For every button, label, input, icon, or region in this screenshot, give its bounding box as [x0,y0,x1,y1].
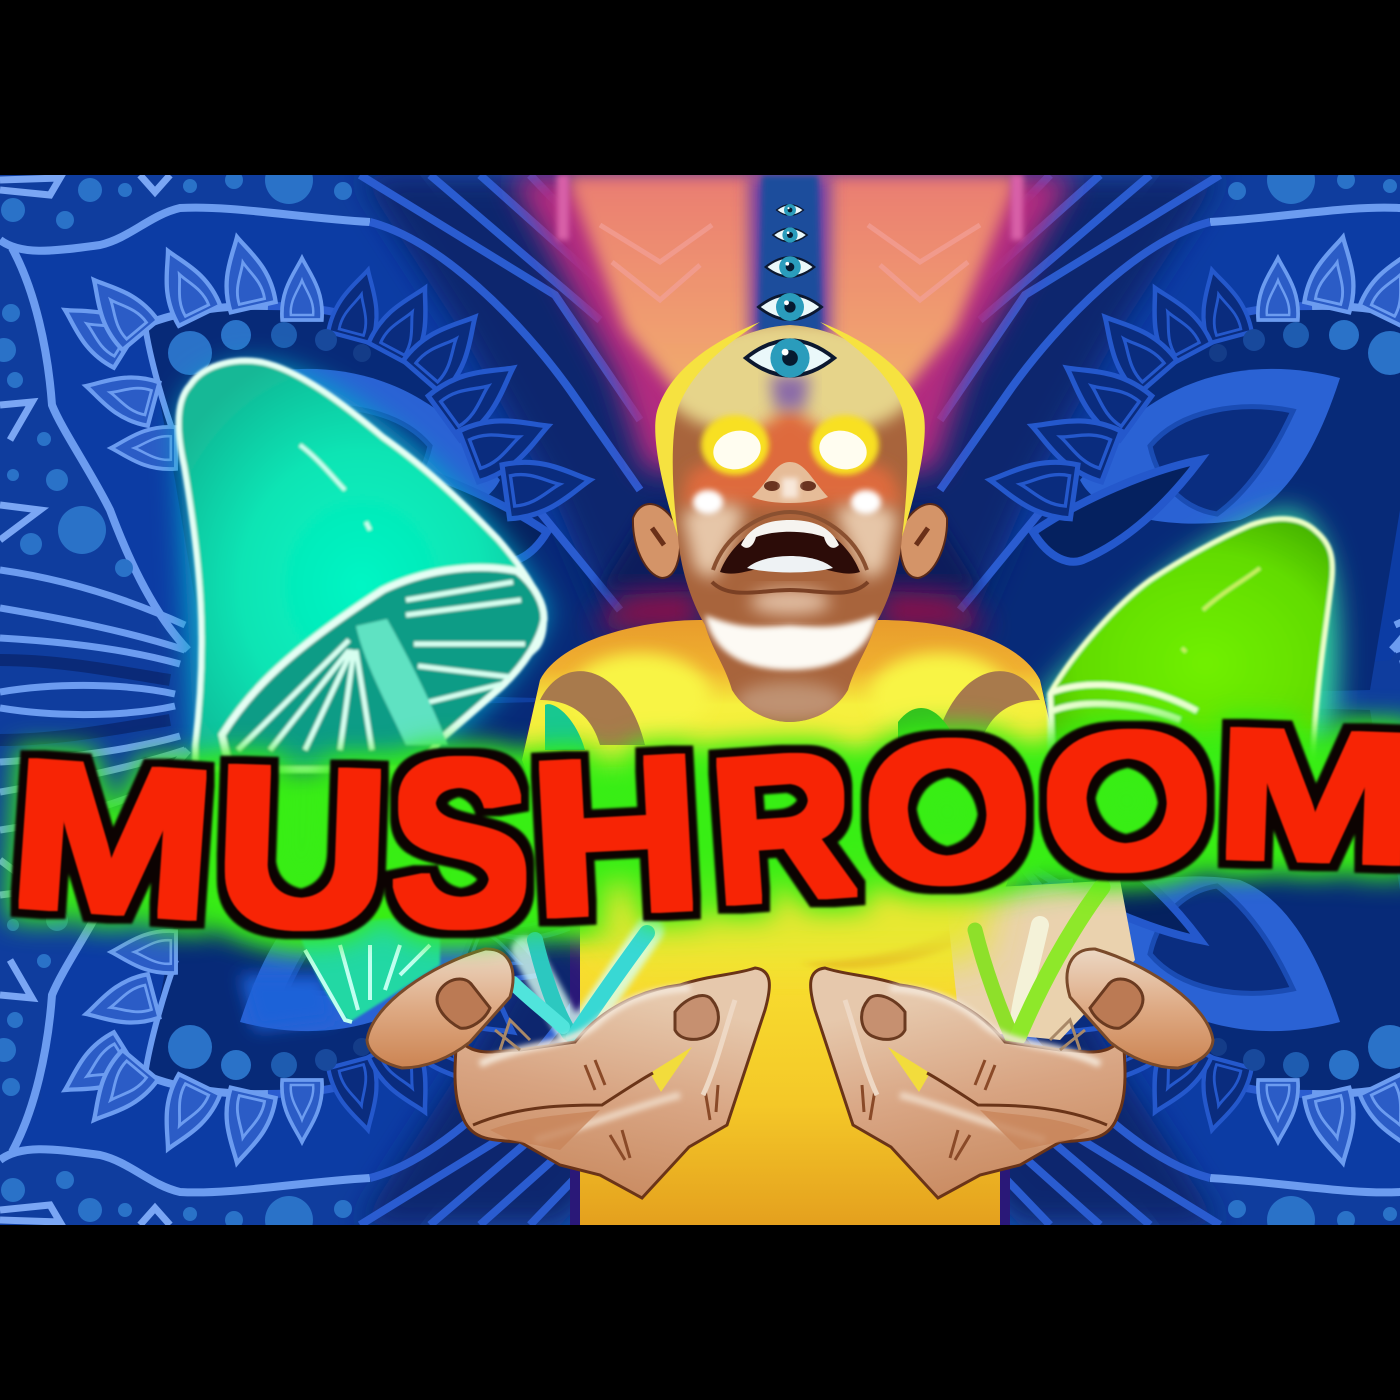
person: head and face [633,320,947,722]
lower teal mushroom gills [240,915,440,1030]
rays above the head [563,175,1020,420]
teal mushroom glow [178,365,548,760]
crimson aura behind head [510,175,1075,630]
title: MUSHROOM: O [855,694,1040,929]
third eye [746,338,834,378]
left hand [367,949,769,1198]
green glow behind title [190,735,1400,960]
title: MUSHROOM: R [704,709,861,947]
title: MUSHROOM: O [1033,686,1221,915]
glowing eyes [701,415,769,475]
teal mushroom [179,361,544,770]
right hand [811,949,1213,1198]
small teal stems in hand [513,930,650,1040]
title: MUSHROOM: H [525,711,707,962]
ears [633,504,947,578]
small green stems in hand [975,887,1102,1037]
title: MUSHROOM: U [211,718,393,976]
illustration: mushroom poster [0,175,1400,1225]
title: MUSHROOM [3,686,1400,976]
blue mandala background [0,156,1400,1244]
yellow headband [655,322,925,537]
nose [752,462,828,503]
artwork frame [0,156,1400,1244]
green mushroom [1050,519,1333,760]
title: MUSHROOM: S [388,710,532,975]
title: MUSHROOM: M [3,717,222,963]
person: torso and arms [520,620,1135,1225]
column of third eyes [750,175,830,340]
title: MUSHROOM: M [1213,691,1400,901]
head shape [663,325,917,722]
green mushroom glow [1040,510,1337,760]
mouth [713,512,867,570]
